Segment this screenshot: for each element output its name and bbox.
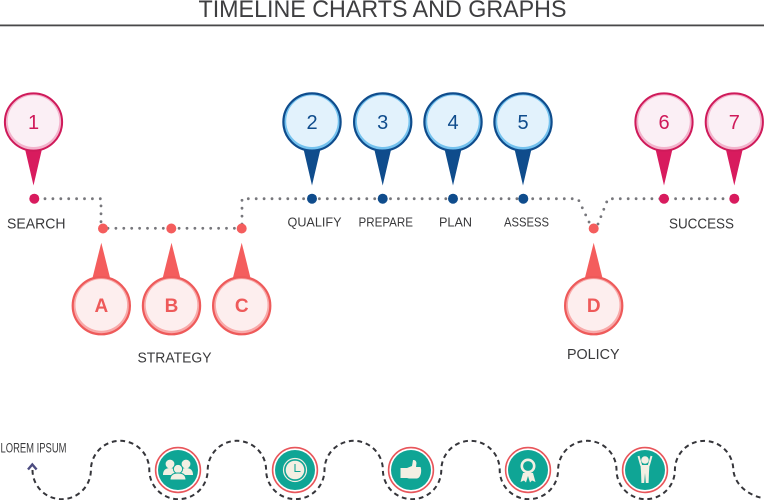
icon: person arms raised <box>623 448 667 492</box>
pin 7: success: 7 <box>729 112 740 134</box>
pin D: policy: D <box>587 296 601 317</box>
label: search: SEARCH <box>7 216 66 232</box>
pin B: strategy <box>143 243 200 334</box>
pin 6: success <box>635 93 693 186</box>
icon: ribbon award <box>506 448 550 492</box>
pin 1: search: 1 <box>28 112 39 134</box>
pin C: strategy: C <box>235 296 249 317</box>
pin 7: success <box>706 93 763 186</box>
pin 3: prepare: 3 <box>377 112 388 134</box>
label: success: SUCCESS <box>669 216 734 232</box>
label: strategy: STRATEGY <box>138 350 212 366</box>
pin C: strategy <box>213 243 270 334</box>
pin A: strategy <box>73 243 130 334</box>
pin 1: search <box>5 93 62 186</box>
pin 4: plan <box>424 93 482 186</box>
pin B: strategy: B <box>165 296 178 317</box>
pin 2: qualify <box>283 93 341 186</box>
icon: clock <box>273 448 317 492</box>
pin 4: plan: 4 <box>447 112 459 134</box>
pin A: strategy: A <box>94 296 108 317</box>
label: prepare: PREPARE <box>358 215 413 230</box>
icon: people <box>156 448 200 492</box>
dashed wavy path <box>32 441 764 499</box>
label: assess: ASSESS <box>504 215 549 230</box>
pin 5: assess <box>494 93 552 186</box>
pin D: policy <box>565 243 622 334</box>
dotted timeline path <box>45 199 734 228</box>
timeline dots <box>29 194 739 234</box>
label: plan: PLAN <box>439 215 472 230</box>
pin 3: prepare <box>354 93 411 186</box>
pin 2: qualify: 2 <box>306 112 318 134</box>
pin 5: assess: 5 <box>517 112 529 134</box>
label: qualify: QUALIFY <box>288 215 342 230</box>
label: policy: POLICY <box>567 347 620 363</box>
icon: arrow head <box>28 464 37 470</box>
icon: thumbs up <box>389 448 433 492</box>
pin 6: success: 6 <box>658 112 670 134</box>
label: lorem ipsum: LOREM IPSUM <box>0 440 66 456</box>
